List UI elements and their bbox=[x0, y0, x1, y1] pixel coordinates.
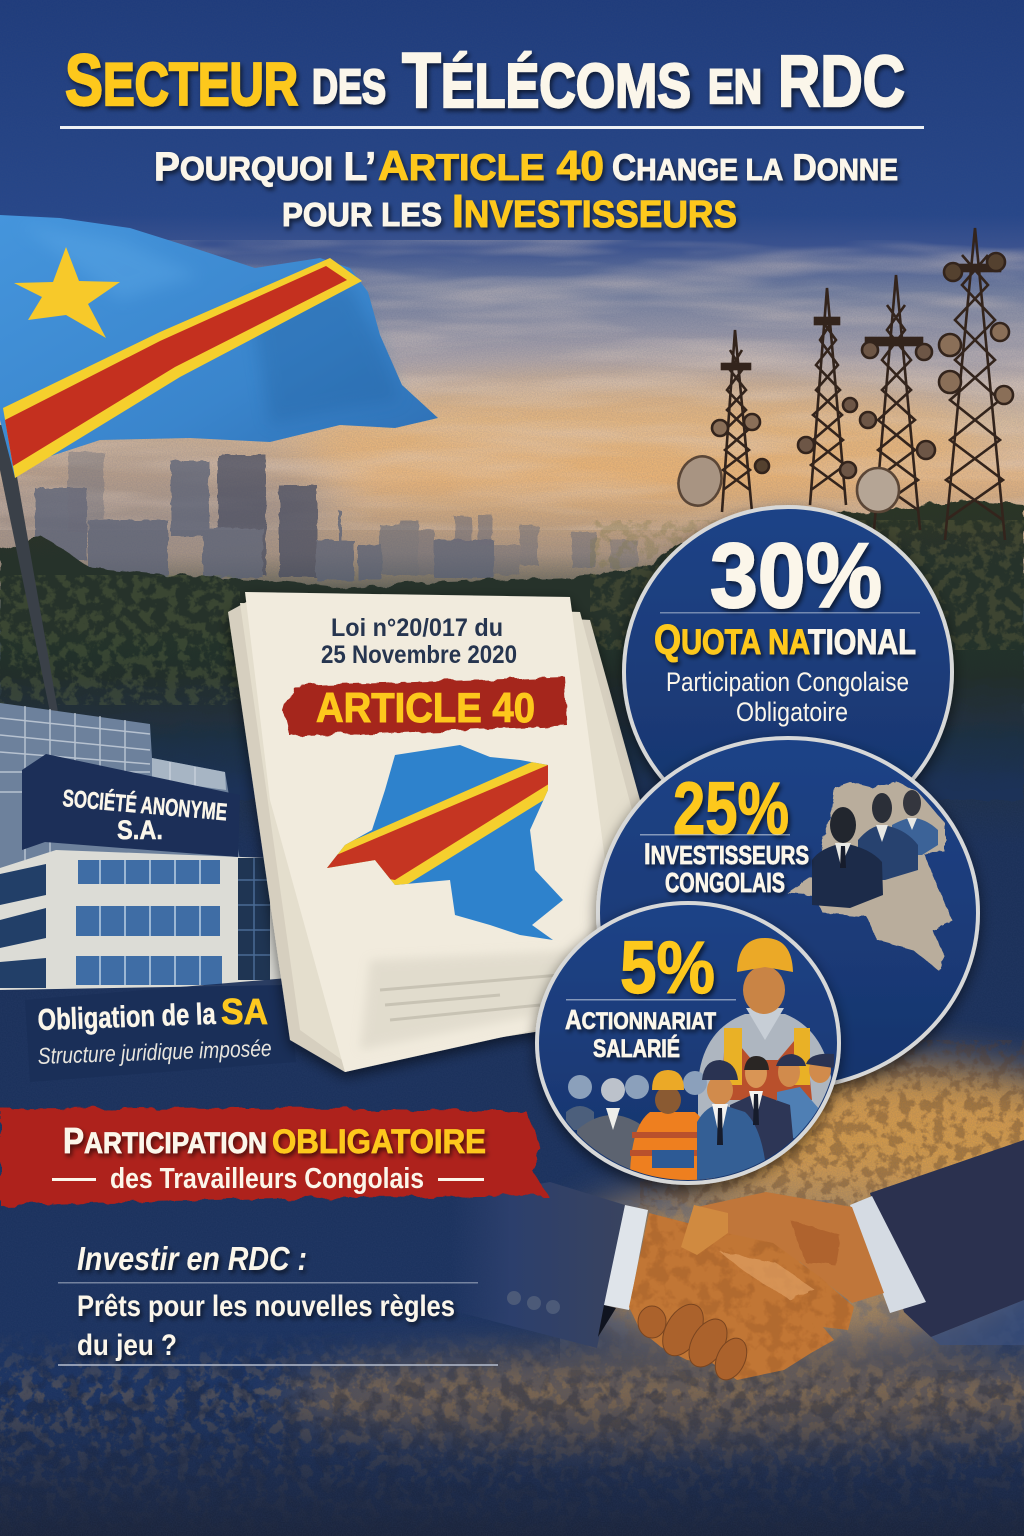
building sign: S.A. bbox=[117, 815, 163, 845]
tower 3 bbox=[860, 275, 935, 530]
DRC flag bbox=[0, 215, 438, 478]
skyline bbox=[35, 452, 638, 580]
telecom towers bbox=[672, 228, 1013, 540]
legal document bbox=[228, 592, 640, 1072]
building bbox=[0, 703, 285, 990]
circle 5 percent: SALARIÉ bbox=[593, 1034, 680, 1063]
orange worker bbox=[630, 1070, 715, 1190]
main worker bbox=[698, 938, 832, 1120]
circle 5 percent: 5% bbox=[620, 926, 715, 1009]
circle 5 percent bbox=[537, 903, 839, 1190]
suited workers bbox=[697, 1054, 834, 1190]
subtitle: POURQUOI L’ bbox=[154, 145, 376, 189]
bottom texture bbox=[0, 1342, 1024, 1496]
subtitle bbox=[154, 142, 898, 237]
flag pole bbox=[0, 425, 58, 712]
workers participation banner: des Travailleurs Congolais bbox=[110, 1163, 424, 1195]
circle 25 percent: INVESTISSEURS bbox=[644, 838, 809, 871]
background colleagues bbox=[566, 1071, 707, 1170]
front hand bbox=[629, 1213, 854, 1380]
handshake bbox=[450, 1140, 1024, 1385]
closing question: du jeu ? bbox=[77, 1329, 177, 1362]
tower 1 bbox=[712, 330, 769, 512]
title: RDC bbox=[778, 42, 905, 122]
tower 2 bbox=[798, 288, 857, 505]
investor back bbox=[892, 790, 938, 855]
circle 30 percent bbox=[624, 507, 952, 837]
beige map bbox=[787, 782, 952, 970]
flag stripe bbox=[3, 258, 362, 478]
workers participation banner bbox=[0, 1108, 548, 1205]
flag star bbox=[14, 247, 120, 338]
subtitle: INVESTISSEURS bbox=[452, 185, 737, 237]
thumb bbox=[681, 1205, 728, 1255]
front page bbox=[245, 592, 625, 1072]
closing question: Investir en RDC : bbox=[77, 1240, 307, 1277]
forest hills bbox=[0, 500, 1024, 800]
title: DES bbox=[312, 61, 386, 114]
workers participation banner: PARTICIPATION bbox=[63, 1120, 267, 1161]
title bbox=[65, 36, 905, 124]
right cuff bbox=[850, 1196, 926, 1313]
circle 30 percent: 30% bbox=[710, 525, 882, 627]
title: TÉLÉCOMS bbox=[402, 36, 691, 124]
subtitle: ARTICLE 40 bbox=[378, 142, 604, 189]
warm glow right bbox=[670, 1065, 1024, 1225]
left cuff bbox=[604, 1205, 648, 1310]
workers participation banner: OBLIGATOIRE bbox=[272, 1123, 486, 1161]
SA obligation caption: Structure juridique imposée bbox=[37, 1035, 272, 1069]
satellite dishes bbox=[672, 450, 899, 512]
subtitle: POUR LES bbox=[282, 196, 442, 233]
building sign bbox=[22, 754, 240, 857]
SA obligation caption: SA bbox=[221, 991, 268, 1032]
back hand bbox=[697, 1192, 884, 1303]
law reference: Loi n°20/017 du bbox=[331, 614, 503, 642]
building sign: SOCIÉTÉ ANONYME bbox=[61, 784, 228, 826]
article 40 banner bbox=[284, 677, 568, 736]
tower 4 bbox=[939, 228, 1013, 540]
left sleeve bbox=[450, 1182, 625, 1348]
title: SECTEUR bbox=[65, 41, 298, 121]
circle 25 percent bbox=[598, 738, 978, 1088]
circle 25 percent: CONGOLAIS bbox=[665, 867, 785, 898]
circle 5 percent: ACTIONNARIAT bbox=[565, 1004, 716, 1035]
investor front bbox=[812, 807, 883, 908]
circle 30 percent: Obligatoire bbox=[736, 697, 848, 727]
law reference: 25 Novembre 2020 bbox=[321, 641, 517, 669]
title: EN bbox=[708, 61, 762, 114]
law reference bbox=[321, 614, 517, 669]
circle 30 percent: QUOTA NATIONAL bbox=[654, 616, 916, 663]
subtitle: CHANGE LA DONNE bbox=[612, 147, 898, 188]
circle 25 percent: 25% bbox=[673, 767, 789, 850]
investor silhouettes bbox=[812, 790, 938, 908]
SA obligation caption bbox=[25, 978, 296, 1082]
article 40 banner: ARTICLE 40 bbox=[316, 684, 535, 731]
right sleeve bbox=[870, 1140, 1024, 1337]
closing question bbox=[58, 1240, 498, 1366]
closing question: Prêts pour les nouvelles règles bbox=[77, 1290, 455, 1323]
investor middle bbox=[858, 793, 918, 880]
fingers bbox=[638, 1297, 753, 1385]
map of DRC bbox=[320, 745, 563, 940]
circle 30 percent: Participation Congolaise bbox=[666, 667, 909, 697]
SA obligation caption: Obligation de la bbox=[37, 998, 216, 1037]
